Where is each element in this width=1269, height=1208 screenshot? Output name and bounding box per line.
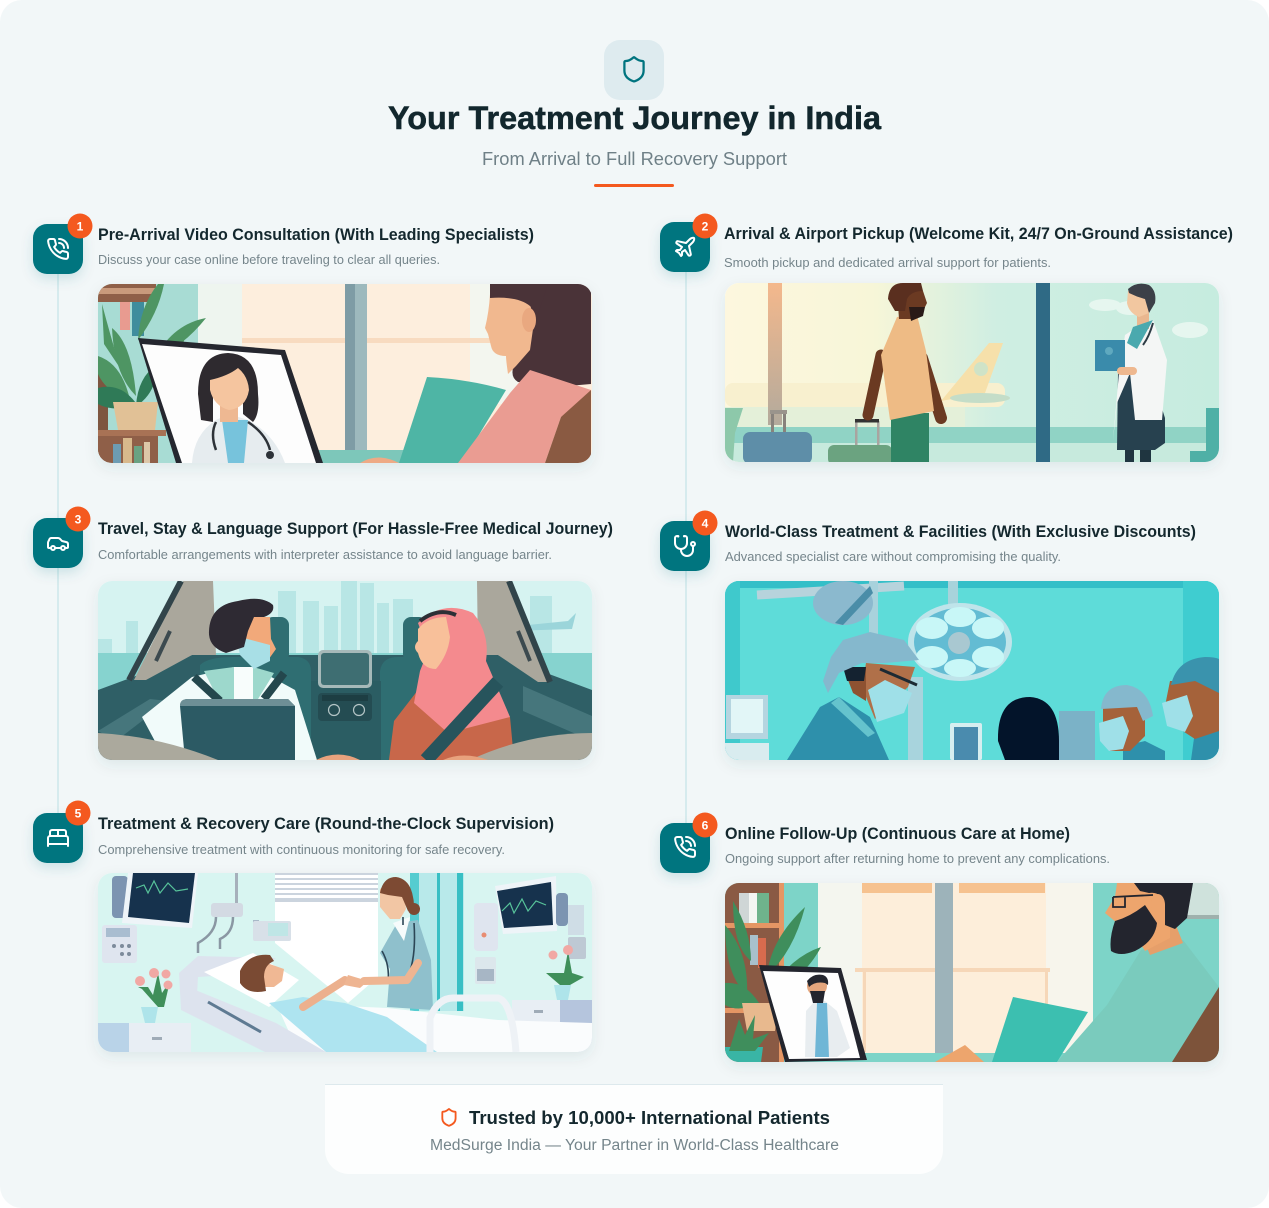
panel: step 6 (660, 812, 1219, 1062)
icon: phone follow-up: 6 (702, 818, 709, 832)
step 4 heading: World-Class Treatment & Facilities (With Exclusive Discounts) (725, 523, 1196, 541)
illustration: airport pickup (725, 283, 1219, 465)
step 2 description: Smooth pickup and dedicated arrival support for patients. (724, 256, 1051, 270)
panel: step 2 (660, 214, 1233, 465)
title: Your Treatment Journey in India (388, 100, 881, 136)
illustration: online follow-up (725, 883, 1219, 1062)
panel: step 1 (33, 214, 592, 463)
timeline connector: right (685, 270, 687, 825)
step 1 description: Discuss your case online before traveling to clear all queries. (98, 253, 440, 267)
step 1 heading: Pre-Arrival Video Consultation (With Leading Specialists) (98, 226, 534, 244)
icon: plane (660, 214, 718, 272)
icon: phone call: 1 (77, 220, 84, 234)
step 5 description: Comprehensive treatment with continuous monitoring for safe recovery. (98, 843, 505, 857)
panel: step 3 (33, 506, 613, 760)
footer subtext: MedSurge India — Your Partner in World-Class Healthcare (430, 1137, 839, 1154)
subtitle: From Arrival to Full Recovery Support (482, 149, 787, 169)
illustration: hospital recovery (98, 873, 592, 1052)
icon: bed: 5 (75, 806, 82, 820)
step 2 heading: Arrival & Airport Pickup (Welcome Kit, 24/7 On-Ground Assistance) (724, 225, 1233, 243)
step 3 heading: Travel, Stay & Language Support (For Hassle-Free Medical Journey) (98, 520, 613, 538)
icon: stethoscope (660, 510, 718, 571)
header (388, 40, 881, 187)
icon: stethoscope: 4 (702, 516, 709, 530)
illustration: car journey (98, 581, 592, 760)
footer card (325, 1084, 943, 1174)
step 6 description: Ongoing support after returning home to prevent any complications. (725, 852, 1110, 866)
icon: header shield (604, 40, 664, 100)
icon: car (33, 506, 90, 568)
step 3 description: Comfortable arrangements with interpreter assistance to avoid language barrier. (98, 548, 552, 562)
icon: phone call (33, 214, 92, 274)
icon: bed (33, 800, 90, 863)
step 6 heading: Online Follow-Up (Continuous Care at Home) (725, 825, 1070, 843)
step 4 description: Advanced specialist care without compromising the quality. (725, 550, 1061, 564)
panel: step 4 (660, 510, 1219, 760)
footer heading: Trusted by 10,000+ International Patients (469, 1107, 830, 1128)
illustration: video consultation (98, 284, 592, 463)
icon: plane: 2 (702, 220, 709, 234)
icon: phone follow-up (660, 812, 718, 873)
illustration: operating theatre (725, 581, 1219, 760)
icon: footer shield (442, 1109, 456, 1126)
panel: step 5 (33, 800, 592, 1052)
timeline connector: left (57, 270, 59, 815)
title underline (594, 184, 674, 187)
icon: car: 3 (75, 512, 82, 526)
step 5 heading: Treatment & Recovery Care (Round-the-Clock Supervision) (98, 815, 554, 833)
